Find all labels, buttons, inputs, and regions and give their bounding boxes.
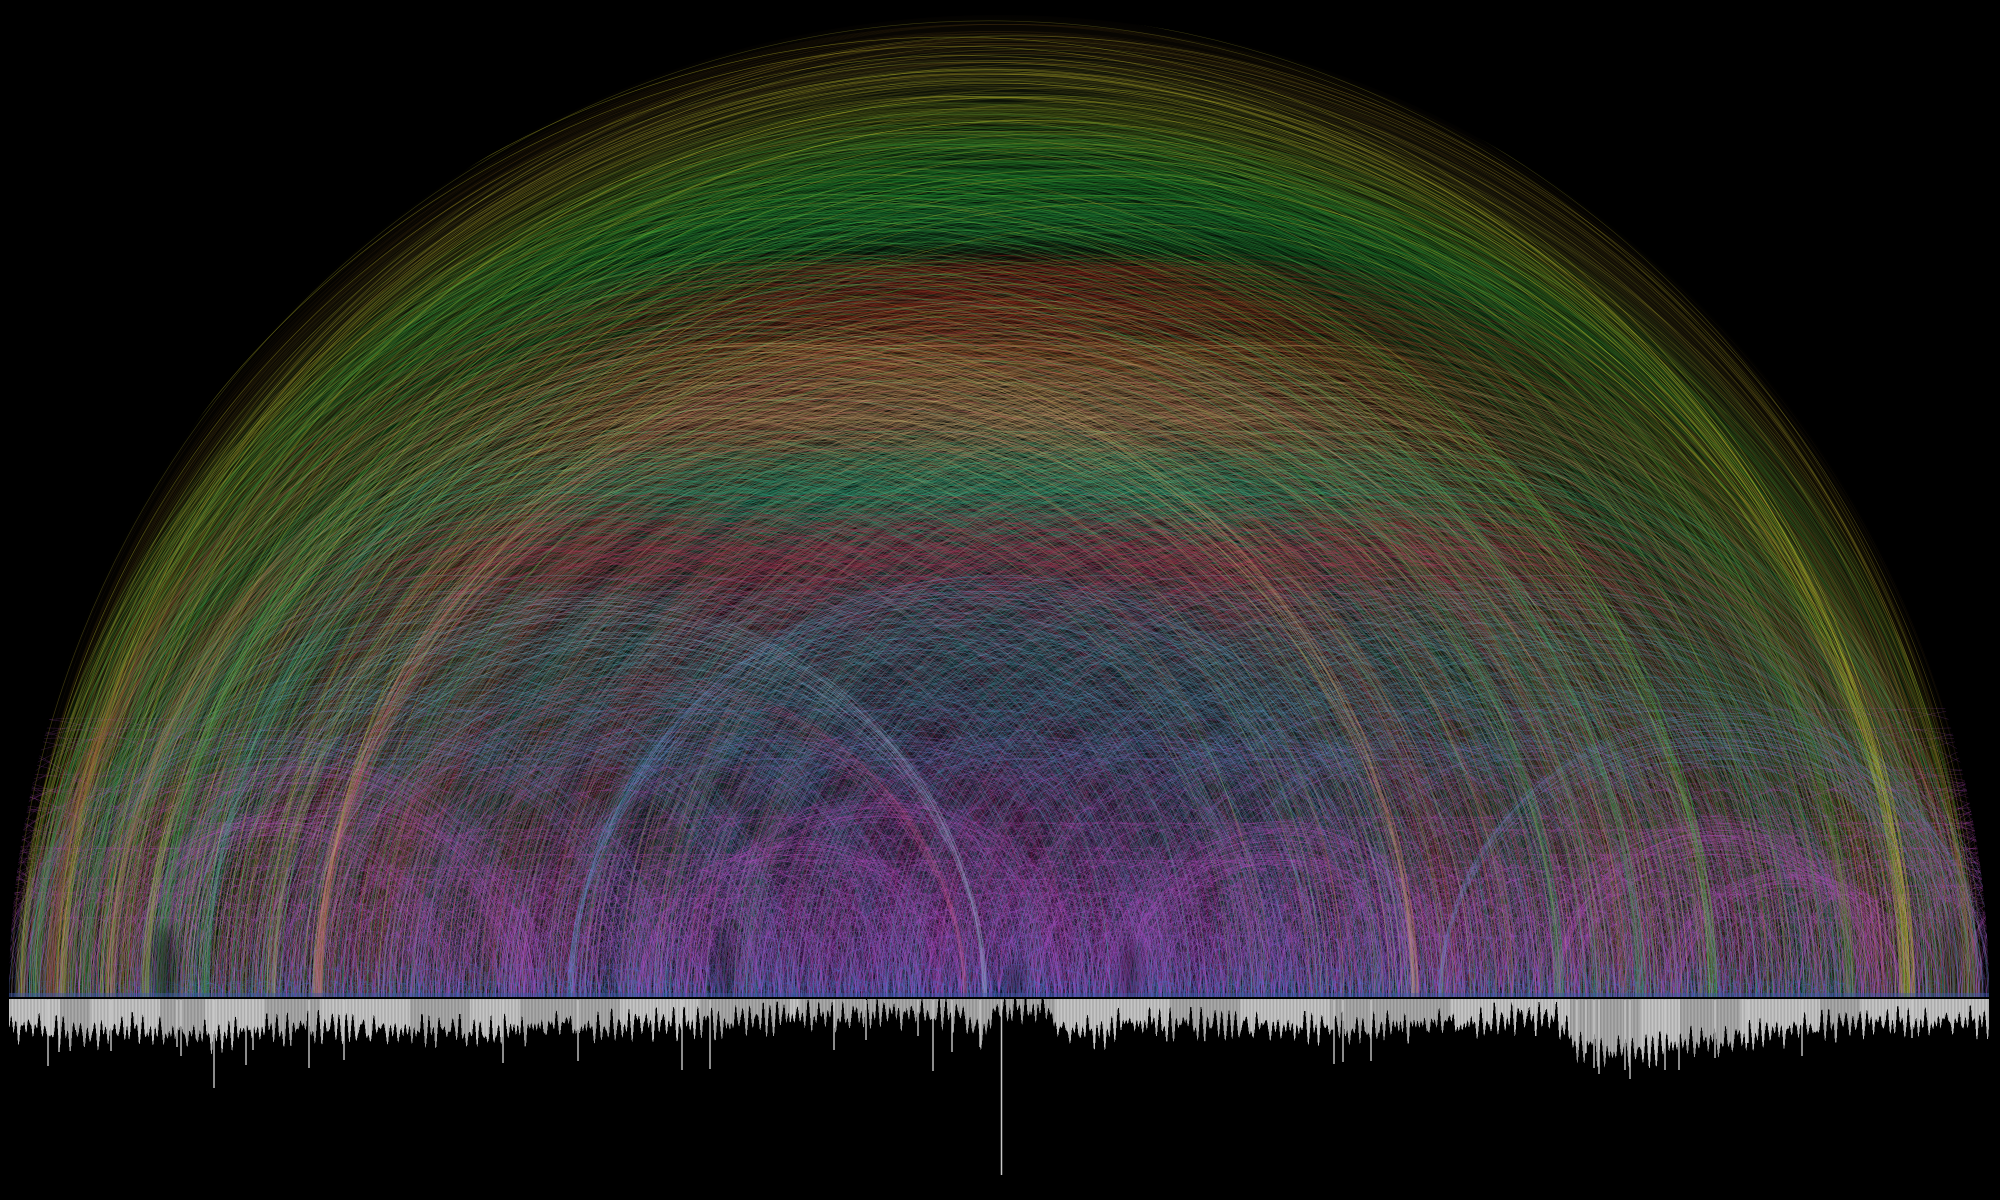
short arcs: purple, magenta and blue — [0, 708, 2000, 998]
darker book sections — [60, 999, 1860, 1068]
longest chapter spike — [1000, 1000, 1002, 1175]
medium arcs: teal and crimson bands — [4, 431, 1994, 998]
bar chart: chapter lengths — [9, 999, 1989, 1175]
blue foot strip — [9, 993, 1989, 997]
long arcs: red and tan bands — [20, 255, 1978, 998]
dark gaps between books — [146, 913, 1960, 997]
long single-chapter spikes — [48, 1000, 1912, 1088]
purple domes — [57, 757, 1920, 998]
bars body — [9, 999, 1989, 1068]
